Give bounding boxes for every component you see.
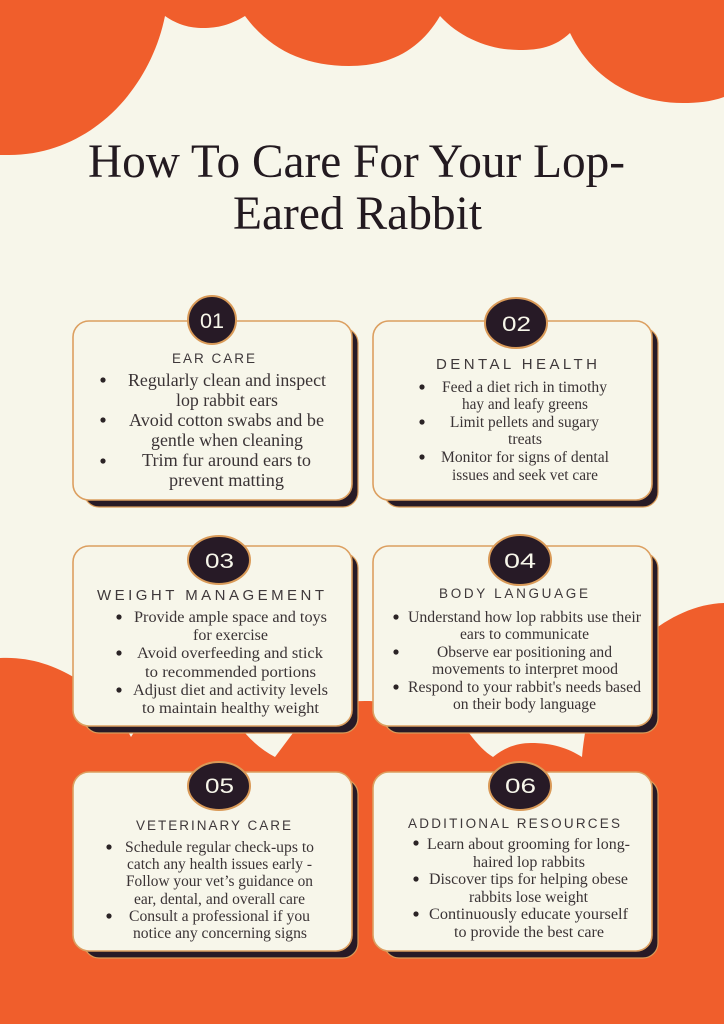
bullet list: dental health: Limit pellets and sugary [450,414,599,431]
panel: 01 ear care [73,296,358,507]
bullet list: additional resources: Continuously educate yourself [429,906,629,923]
panel: 04 body language [373,535,658,733]
bullet list: ear care: prevent matting [169,470,284,490]
number badge 06 [489,762,551,810]
number badge 02 [485,298,547,348]
bullet list: weight management: to recommended portions [145,664,316,681]
bullet list: weight management: Avoid overfeeding and stick [137,645,323,662]
bullet list: body language [393,609,642,713]
bullet list: dental health: issues and seek vet care [452,467,598,484]
bullet list: weight management: for exercise [193,627,268,644]
bullet list: additional resources: to provide the best care [454,924,604,941]
bullet list: veterinary care: Schedule regular check-ups to [125,839,314,856]
bullet list: ear care: Regularly clean and inspect [128,370,326,390]
panel: 05 veterinary care [73,762,358,958]
number badge 03: 03 [205,550,234,573]
bullet list: body language: ears to communicate [460,626,589,643]
bullet list: body language: Observe ear positioning and [437,644,612,661]
bullet list: dental health: hay and leafy greens [462,396,588,413]
title: Eared Rabbit [233,187,483,240]
panel: 06 additional resources [373,762,658,958]
number badge 04: 04 [504,550,536,573]
heading: ear care: EAR CARE [172,351,255,366]
bullet list: ear care: Avoid cotton swabs and be [129,410,324,430]
bullet list: ear care [100,370,326,490]
number badge 04 [489,535,551,585]
bullet list: veterinary care: catch any health issues early - [127,856,312,873]
number badge 06: 06 [505,775,536,798]
panel: 03 weight management [73,536,358,733]
bullet list: ear care: lop rabbit ears [176,390,278,410]
number badge 01: 01 [200,310,224,333]
bullet list: ear care: gentle when cleaning [151,430,303,450]
bullet list: additional resources [413,836,630,941]
panel: 02 dental health [373,298,658,507]
bullet list: veterinary care [106,839,314,942]
bullet list: weight management: Adjust diet and activity levels [133,682,328,699]
title: How To Care For Your Lop- [88,135,625,188]
bullet list: weight management: to maintain healthy weight [142,700,320,717]
number badge 01 [188,296,236,344]
bullet list: ear care: Trim fur around ears to [142,450,311,470]
heading: dental health: DENTAL HEALTH [436,356,597,373]
number badge 03 [188,536,250,584]
bullet list: veterinary care: Consult a professional if you [129,908,310,925]
bullet list: veterinary care: notice any concerning signs [133,925,307,942]
bullet list: dental health: Monitor for signs of dental [441,449,609,466]
bullet list: additional resources: Learn about grooming for long- [427,836,630,853]
number badge 05 [188,762,250,810]
bullet list: body language: Understand how lop rabbits use their [408,609,642,626]
heading: weight management: WEIGHT MANAGEMENT [97,587,324,604]
heading: veterinary care: VETERINARY CARE [136,818,291,833]
bullet list: additional resources: Discover tips for helping obese [429,871,628,888]
heading: additional resources: ADDITIONAL RESOURCES [408,816,620,831]
bullet list: body language: on their body language [453,696,596,713]
bullet list: dental health: Feed a diet rich in timothy [442,379,607,396]
bullet list: body language: Respond to your rabbit's needs based [408,679,641,696]
bullet list: dental health: treats [508,431,542,448]
bullet list: weight management [116,609,328,717]
number badge 05: 05 [205,775,234,798]
bullet list: veterinary care: Follow your vet’s guidance on [126,873,313,890]
top orange scalloped shape [0,0,724,155]
heading: body language: BODY LANGUAGE [439,586,588,601]
bullet list: additional resources: haired lop rabbits [473,854,585,871]
bullet list: dental health [419,379,609,484]
bullet list: body language: movements to interpret mood [432,661,618,678]
bullet list: weight management: Provide ample space and toys [134,609,327,626]
bottom orange scalloped shape [0,603,724,1024]
bullet list: veterinary care: ear, dental, and overall care [134,891,305,908]
number badge 02: 02 [502,313,531,336]
title [88,135,625,240]
bullet list: additional resources: rabbits lose weight [469,889,589,906]
